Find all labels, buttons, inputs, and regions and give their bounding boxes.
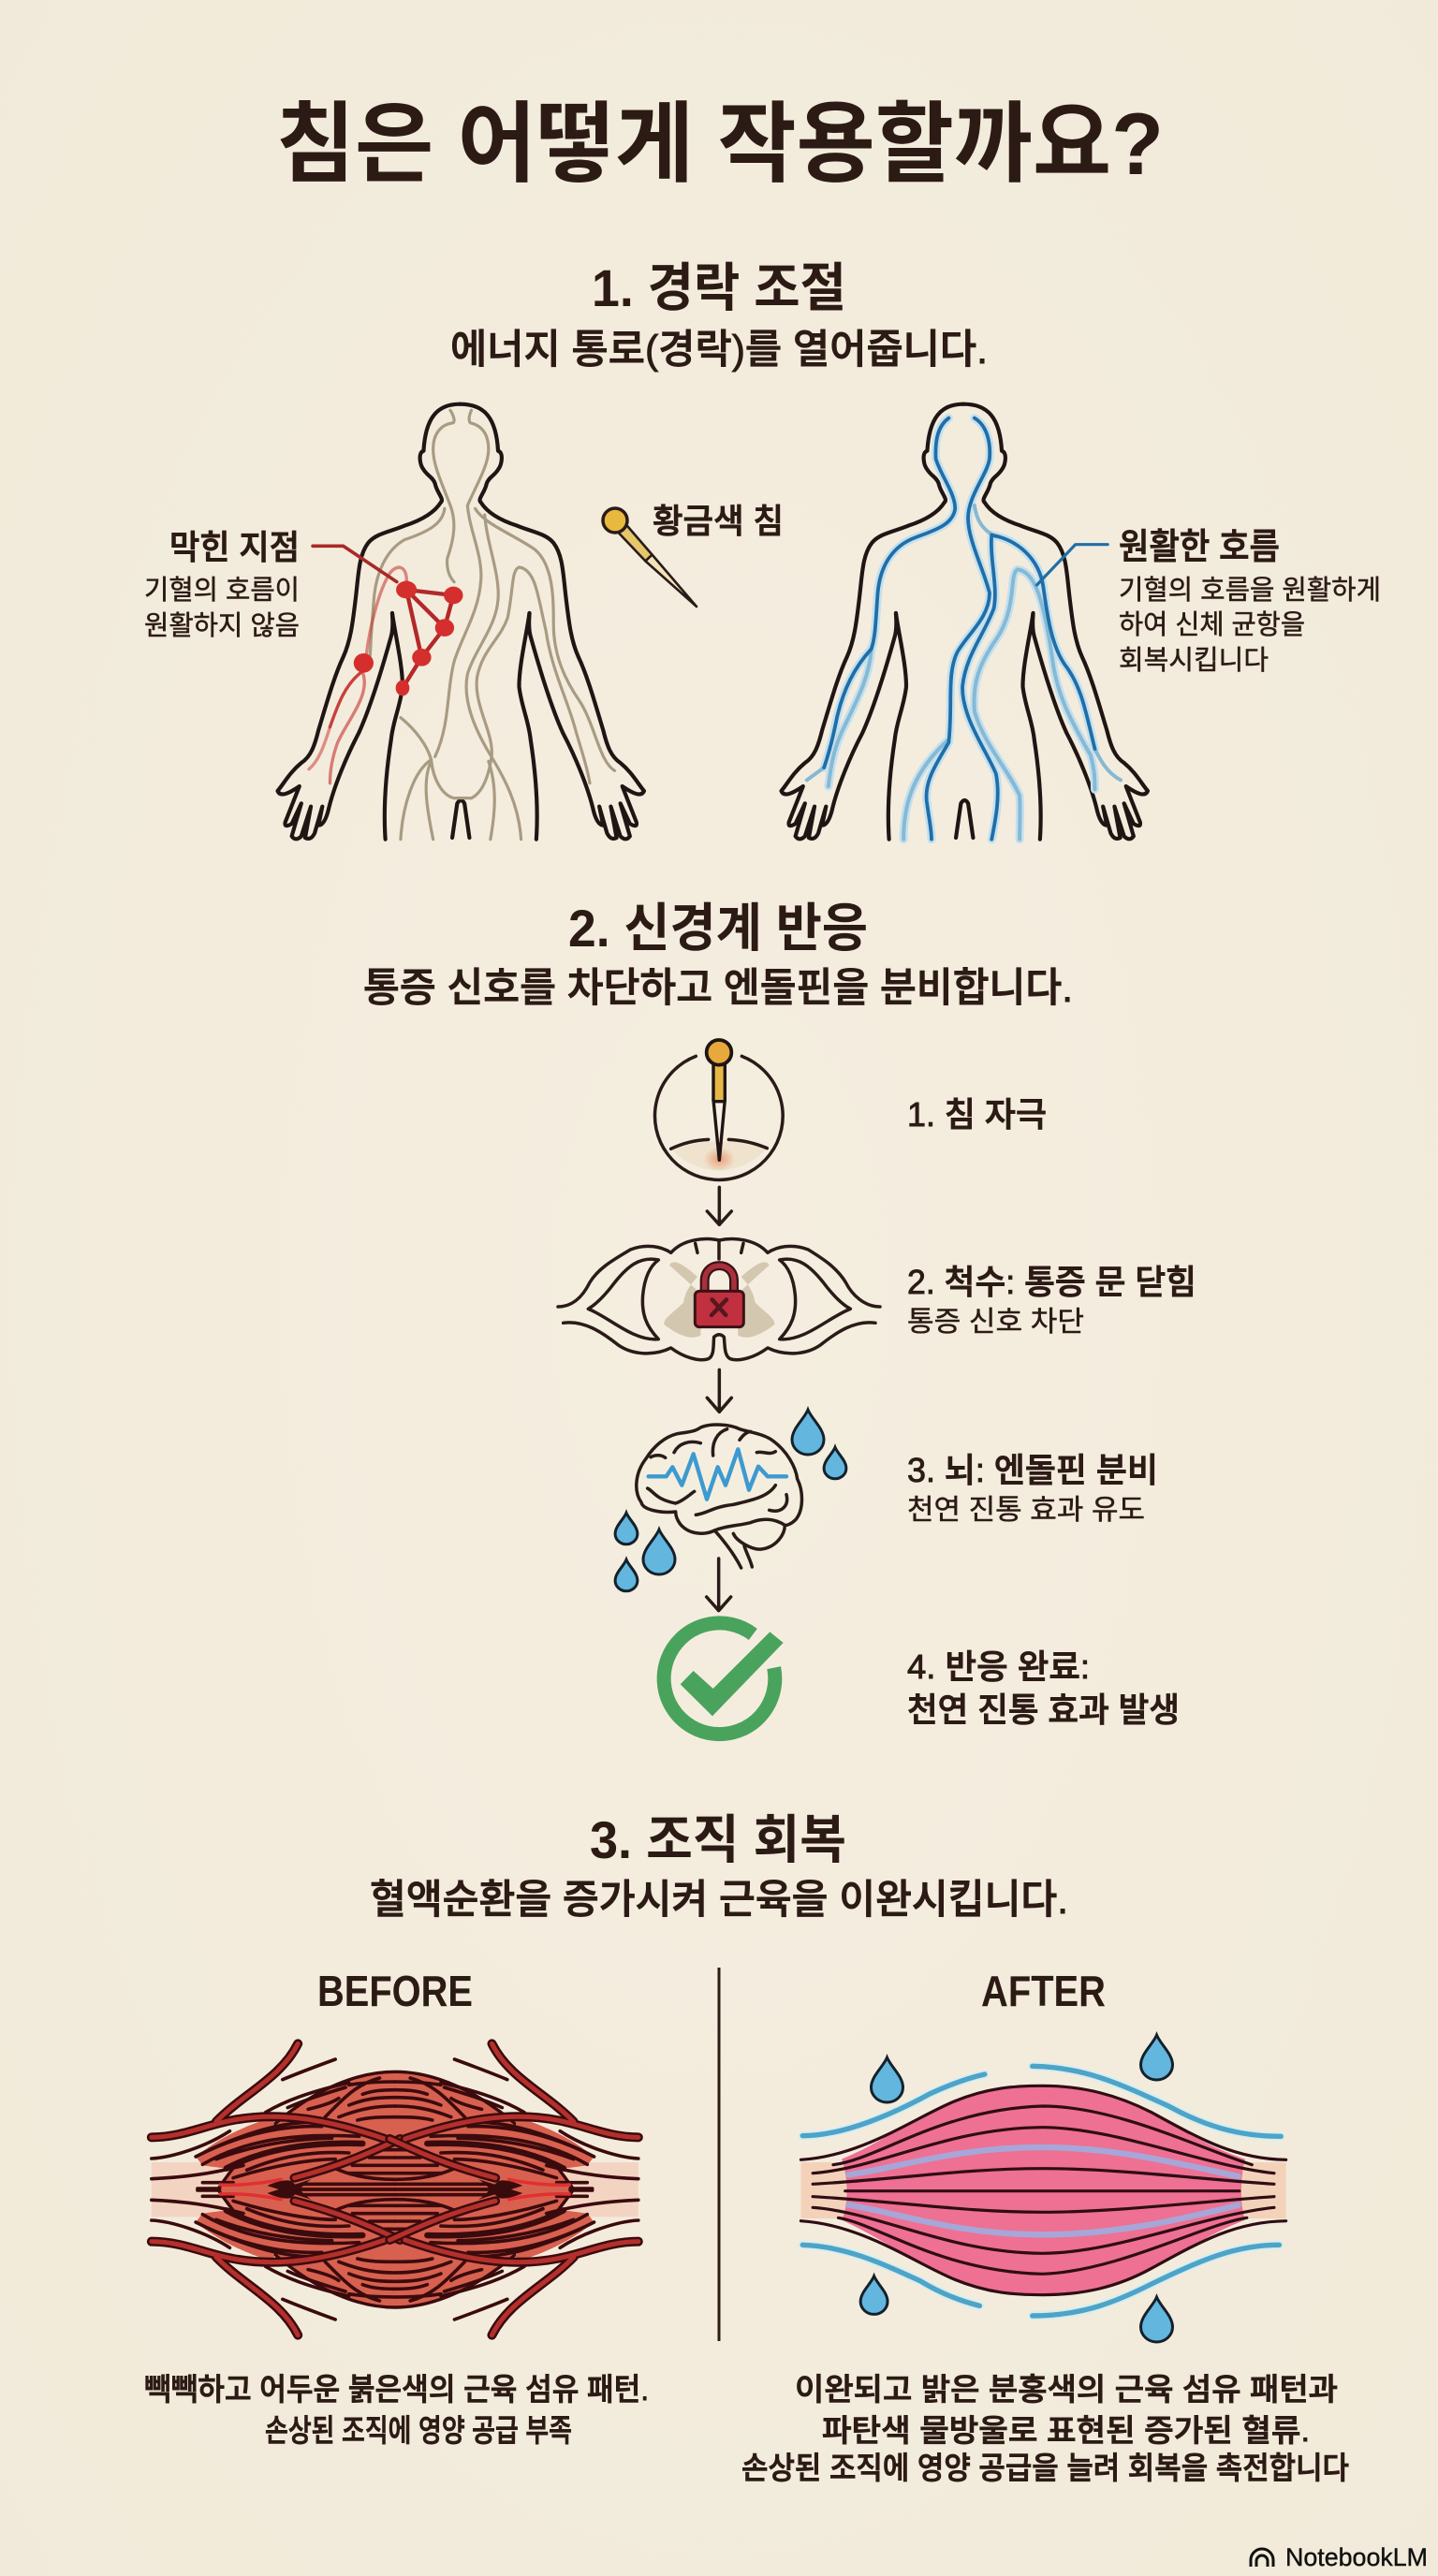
after caption: 파탄색 물방울로 표현된 증가된 혈류. [822, 2413, 1310, 2448]
label: blocked point: 원활하지 않음 [144, 610, 300, 641]
section 1 subtitle: 에너지 통로(경락)를 열어줍니다. [450, 328, 988, 373]
leader line: smooth flow [1036, 545, 1108, 585]
arrow: brain to result [707, 1559, 731, 1611]
muscle fibers [800, 2086, 1286, 2295]
red blocked channels [309, 567, 406, 783]
after heading: AFTER [981, 1967, 1106, 2015]
step 2 label: 통증 신호 차단 [907, 1307, 1084, 1338]
label: golden needle: 황금색 침 [653, 502, 784, 540]
muscle: after [800, 2066, 1286, 2316]
fibers and vessels [152, 2043, 638, 2335]
water drops: after [860, 2035, 1172, 2342]
title: 침은 어떻게 작용할까요? [276, 95, 1164, 193]
after caption: 이완되고 밝은 분홍색의 근육 섬유 패턴과 [795, 2372, 1338, 2407]
before caption: 손상된 조직에 영양 공급 부족 [265, 2413, 572, 2448]
step 4 label: 4. 반응 완료: [907, 1647, 1090, 1686]
tan meridian lines [370, 410, 615, 840]
flow diagram icons [558, 1040, 880, 1412]
before caption: 빽빽하고 어두운 붉은색의 근육 섬유 패턴. [144, 2372, 649, 2407]
step 3 label [907, 1451, 1158, 1526]
blue meridian lines [807, 418, 1121, 840]
section 2 heading: 2. 신경계 반응 [568, 899, 868, 958]
arrow: spine to brain [707, 1369, 731, 1412]
step 2 label: 2. 척수: 통증 문 닫힘 [907, 1263, 1196, 1301]
label: smooth flow: 회복시킵니다 [1119, 645, 1269, 676]
before heading: BEFORE [317, 1967, 473, 2015]
body outline [782, 404, 1148, 840]
icon: needle in skin [654, 1040, 783, 1179]
step 4 label [907, 1647, 1180, 1729]
NotebookLM logo: NotebookLM [1285, 2543, 1428, 2571]
step 3 label: 천연 진통 효과 유도 [907, 1495, 1145, 1526]
icon: green check [664, 1623, 784, 1734]
body figure: smooth flow [782, 404, 1148, 840]
step 4 label: 천연 진통 효과 발생 [907, 1690, 1180, 1729]
label: blocked point: 기혈의 호름이 [144, 575, 300, 606]
before caption [144, 2372, 649, 2448]
section 3 subtitle: 혈액순환을 증가시켜 근육을 이완시킵니다. [370, 1878, 1068, 1923]
label: smooth flow: 기혈의 호름을 원활하게 [1119, 575, 1381, 606]
muscle belly [218, 2071, 574, 2307]
body figure: blocked meridians [278, 404, 644, 840]
body outline [278, 404, 644, 840]
step 3 label: 3. 뇌: 엔돌핀 분비 [907, 1451, 1158, 1489]
icon: spinal cord with lock [558, 1239, 880, 1360]
label: blocked point [144, 528, 300, 641]
after caption: 손상된 조직에 영양 공급을 늘려 회복을 촉전합니다 [741, 2451, 1349, 2485]
section 2 subtitle: 통증 신호를 차단하고 엔돌핀을 분비합니다. [363, 966, 1073, 1011]
after caption [741, 2372, 1349, 2485]
endorphin drops around brain [615, 1410, 846, 1591]
leader line: blocked point [313, 546, 397, 582]
label: blocked point: 막힌 지점 [169, 528, 300, 566]
blue blood vessels [802, 2066, 1281, 2316]
icon: golden needle [603, 508, 697, 607]
step 2 label [907, 1263, 1196, 1338]
tendons [800, 2162, 1286, 2218]
red blockage network [354, 581, 462, 695]
muscle belly [842, 2086, 1245, 2295]
section 3 heading: 3. 조직 회복 [590, 1810, 846, 1869]
label: smooth flow: 원활한 호름 [1119, 528, 1280, 567]
tendons [152, 2162, 638, 2217]
section 1 heading: 1. 경락 조절 [592, 258, 846, 317]
label: smooth flow: 하여 신체 균항을 [1119, 609, 1305, 640]
muscle: before [152, 2043, 638, 2335]
icon: brain with wave [637, 1425, 801, 1568]
lilac blood flow bands [848, 2147, 1239, 2234]
step 1 label: 1. 침 자극 [907, 1095, 1047, 1134]
label: smooth flow [1119, 528, 1381, 676]
arrow: needle to spine [707, 1187, 731, 1224]
